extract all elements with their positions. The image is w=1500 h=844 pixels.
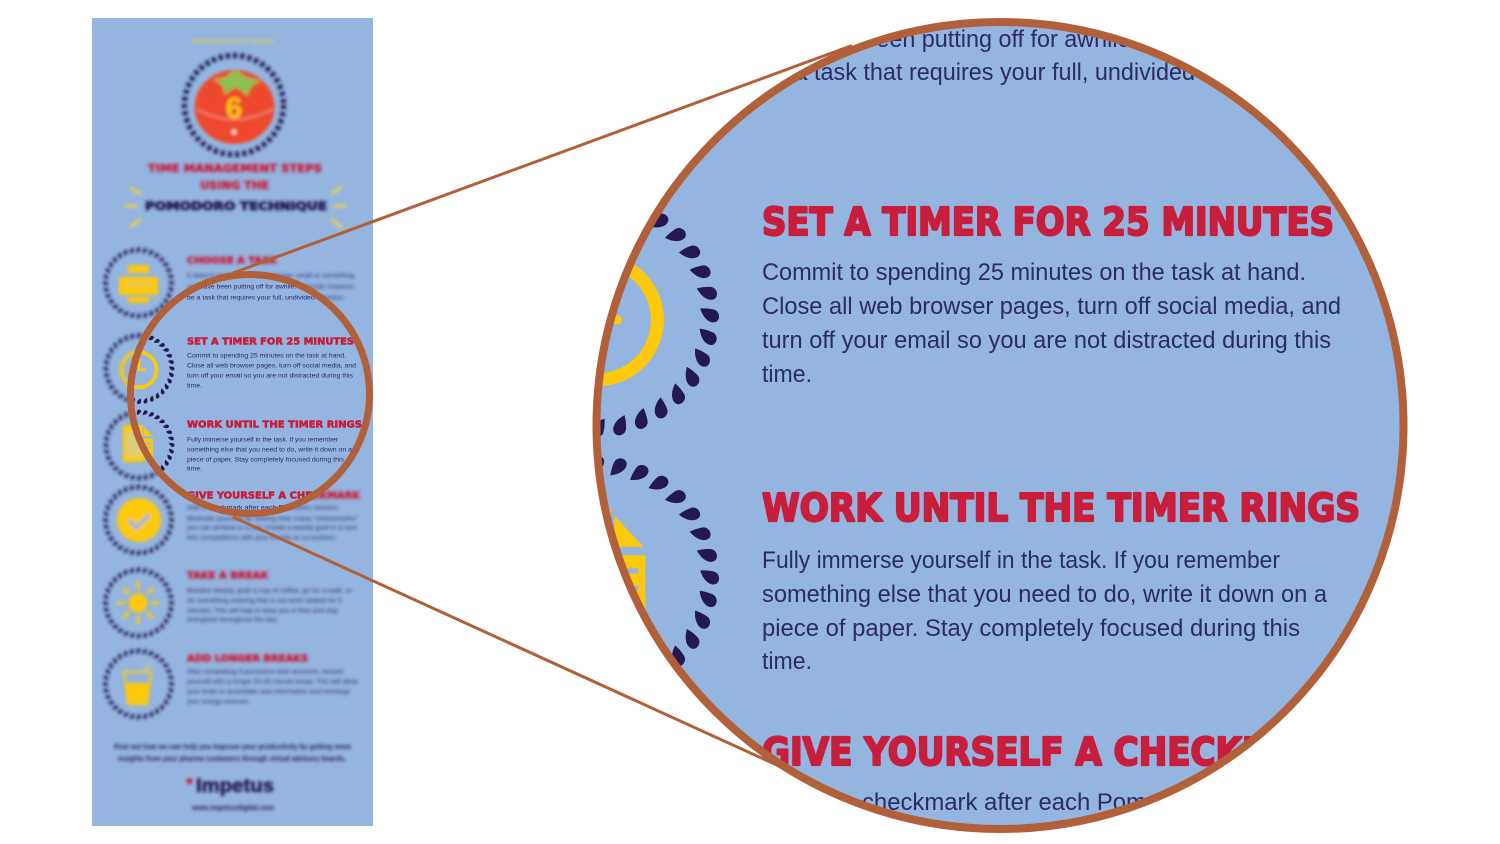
lens text: work until the timer rings: WORK UNTIL THE TIMER RINGS: [187, 420, 362, 430]
magnified heading and text: work until the timer rings: something else that you need to do, write it down on a: [762, 581, 1327, 608]
lens text: work until the timer rings: Fully immerse yourself in the task. If you remember: [187, 436, 339, 444]
footer call to action: insights from your pharma customers through virtual advisory boards.: [118, 754, 346, 763]
magnified heading and text: set a timer: [762, 200, 1341, 388]
lens text: choose a task: It doesn't matter if the task is large, small or something: [187, 272, 354, 280]
step 6 text: add longer breaks: ADD LONGER BREAKS: [187, 654, 308, 664]
step 2 icon: clock: [104, 333, 174, 404]
icons column: [103, 248, 174, 719]
panel: blurred infographic background: [92, 18, 373, 826]
step 4 text: give yourself a checkmark: GIVE YOURSELF A CHECKMARK: [187, 490, 361, 502]
step 1 text: choose a task: you have been putting off for awhile. It should, however,: [187, 284, 355, 290]
step 3 icon: document: [104, 410, 174, 480]
magnified heading and text: work until the timer rings: Fully immerse yourself in the task. If you remember: [762, 547, 1280, 574]
website url: www.impetusdigital.com: [191, 803, 274, 812]
magnified heading and text: set a timer: SET A TIMER FOR 25 MINUTES: [762, 200, 1334, 244]
title: time management steps: TIME MANAGEMENT STEPS: [148, 163, 322, 175]
magnified heading and text: set a timer: turn off your email so you are not distracted during this: [762, 327, 1331, 354]
footer call to action: Find out how we can help you improve your productivity by getting more: [114, 742, 351, 751]
magnified heading and text: set a timer: Commit to spending 25 minutes on the task at hand.: [762, 259, 1306, 286]
magnified heading and text: give yourself a checkmark: [763, 735, 1252, 810]
lens text: set a timer: time.: [187, 382, 202, 390]
title: pomodoro technique: POMODORO TECHNIQUE: [145, 199, 327, 213]
lens text: choose a task: you have been putting off for awhile. It should, however,: [187, 284, 355, 290]
step 5 text: take a break: [187, 570, 353, 624]
magnified heading and text: work until the timer rings: WORK UNTIL THE TIMER RINGS: [762, 486, 1360, 530]
step 6 icon: drink glass: [103, 649, 174, 719]
step 4 text: give yourself a checkmark: Add a checkmark after each Pomodoro session.: [187, 504, 340, 512]
step 4 text: give yourself a checkmark: [187, 490, 361, 542]
step 4 icon: check mark: [103, 485, 174, 555]
magnified heading and text: give yourself a checkmark: checkmark after each Pomodoro: [862, 789, 1207, 816]
step 5 text: take a break: energized throughout the day.: [187, 616, 278, 624]
logo: Impetus: Impetus: [196, 776, 274, 797]
magnified heading and text: give yourself a checkmark: GIVE YOURSELF A CHECKMARK: [762, 730, 1356, 774]
step 4 text: give yourself a checkmark: Motivate yourself by seeing how many "checkmarks": [187, 516, 359, 522]
step 1 icon: printer: [103, 248, 174, 318]
magnified text: previous step tail: be a task that requires your full, undivided: [762, 59, 1195, 86]
step 1 text: choose a task: CHOOSE A TASK: [187, 256, 278, 266]
step 4 text: give yourself a checkmark: into competitions with your friends or co-workers.: [187, 534, 337, 542]
magnified heading and text: work until the timer rings: piece of paper. Stay completely focused during this: [762, 615, 1300, 642]
magnified heading and text: set a timer: Close all web browser pages, turn off social media, and: [762, 293, 1341, 320]
large magnifier circle: [592, 18, 1408, 833]
connector line: bottom: [233, 517, 780, 766]
step 5 text: take a break: Breathe deeply, grab a cup of coffee, go for a walk, or: [187, 588, 353, 594]
step 6 text: add longer breaks: [187, 654, 358, 706]
lens text: set a timer: Close all web browser pages, turn off social media, and: [187, 362, 356, 370]
eyebrow: productivity hack: PRODUCTIVITY HACK: [193, 38, 274, 46]
small lens: sharp area of infographic: [104, 272, 370, 514]
icon: tomato timer: 6: [226, 92, 242, 125]
lens text: work until the timer rings: [187, 420, 362, 472]
lens text: choose a task: [187, 284, 314, 301]
step 5 text: take a break: do something relaxing that is not work related for 5: [187, 598, 342, 604]
lens text: set a timer: SET A TIMER FOR 25 MINUTES: [187, 336, 354, 348]
magnified icon: clock with drop ring: [600, 214, 719, 436]
infographic content (blurred): [103, 38, 361, 812]
icon: tomato timer: [184, 56, 284, 154]
decorative rays around title: [126, 187, 345, 227]
lens text: work until the timer rings: time.: [187, 466, 202, 472]
title: using the: USING THE: [200, 180, 269, 192]
step 5 text: take a break: TAKE A BREAK: [187, 570, 269, 582]
step 5 icon: sun: [103, 568, 174, 638]
lens text: set a timer: Commit to spending 25 minutes on the task at hand.: [187, 352, 346, 360]
step 6 text: add longer breaks: After completing 4 pomodoro task sessions, reward: [187, 668, 343, 676]
lens text: give yourself a checkmark: Add a checkmark after each Pomodoro session.: [187, 504, 340, 512]
footer call to action: [114, 742, 351, 763]
magnified text: previous step tail: you have been putting off for awhile.: [762, 26, 1137, 53]
step 1 text: choose a task: be a task that requires your full, undivided attention.: [187, 294, 345, 302]
step 6 text: add longer breaks: yourself with a longer 20-30 minute break. This will allow: [187, 678, 358, 686]
magnified heading and text: set a timer: time.: [762, 361, 812, 388]
lens text: work until the timer rings: something else that you need to do, write it down on a: [187, 446, 352, 454]
step 1 text: choose a task: It doesn't matter if the task is large, small or something: [187, 272, 354, 280]
magnified text: previous step tail: [800, 30, 1194, 85]
connector line: top: [233, 46, 852, 273]
lens text: work until the timer rings: piece of paper. Stay completely focused during this: [187, 456, 345, 464]
step 6 text: add longer breaks: your brain to assimilate new information and recharge: [187, 688, 350, 696]
magnified icon: document with drop ring: [602, 457, 719, 666]
lens text: set a timer: turn off your email so you are not distracted during this: [187, 372, 354, 380]
lens text: choose a task: be a task that requires your full, undivided attention.: [187, 294, 345, 302]
step 1 text: choose a task: [187, 256, 355, 302]
step 6 text: add longer breaks: your energy reserves.: [187, 698, 250, 706]
lens text: give yourself a checkmark: [188, 491, 312, 510]
magnified heading and text: work until the timer rings: [762, 486, 1360, 675]
lens text: give yourself a checkmark: GIVE YOURSELF A CHECKMARK: [187, 490, 361, 502]
lens text: set a timer: [187, 336, 356, 390]
step 5 text: take a break: minutes. This will help to keep you in flow and stay: [187, 608, 339, 614]
step 4 text: give yourself a checkmark: you can achieve in a day. Create a weekly goal or a race: [187, 524, 357, 532]
magnified heading and text: work until the timer rings: time.: [762, 648, 812, 675]
